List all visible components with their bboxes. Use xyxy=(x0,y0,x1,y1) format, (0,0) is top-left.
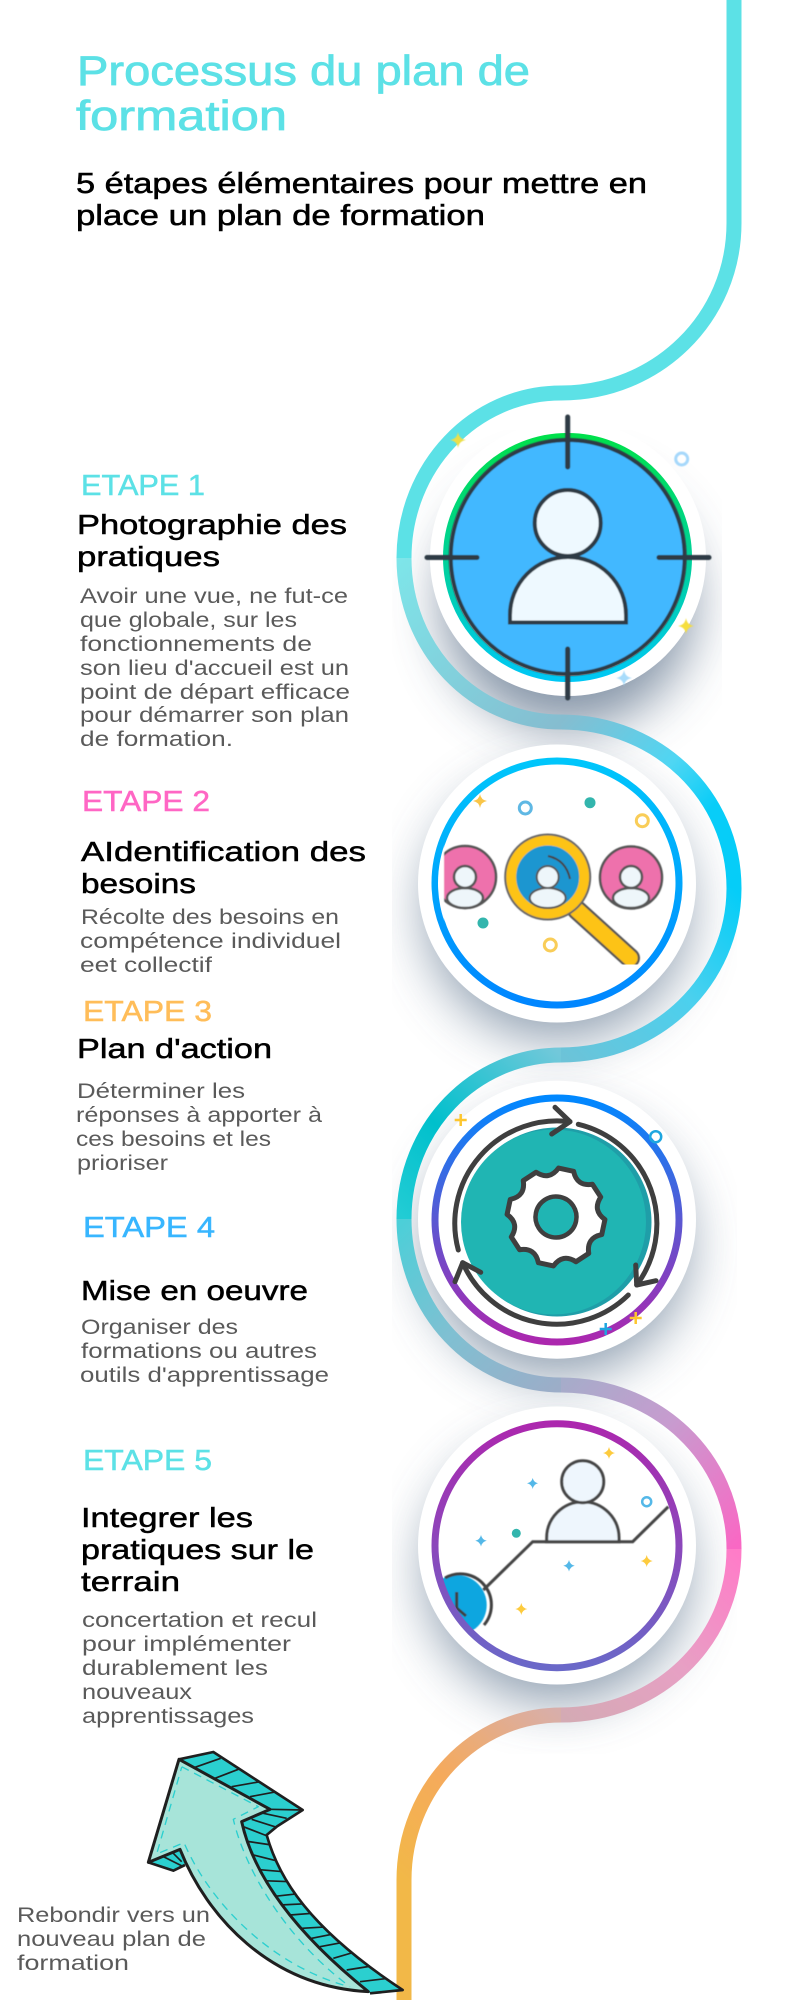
step 5 description: apprentissages xyxy=(82,1704,254,1728)
step 4 description: outils d'apprentissage xyxy=(80,1363,329,1387)
step 2 label: ETAPE 2 xyxy=(82,786,210,818)
step 3 text xyxy=(76,996,322,1175)
subtitle xyxy=(76,168,647,232)
icon: magnifier over people xyxy=(418,744,696,1022)
title: Processus du plan de xyxy=(77,47,530,94)
step 3 label: ETAPE 3 xyxy=(83,996,212,1028)
step 2 description: Récolte des besoins en xyxy=(81,905,339,929)
title xyxy=(76,47,530,139)
step 1 description: point de départ efficace xyxy=(80,680,350,704)
step 1 description: que globale, sur les xyxy=(80,608,297,632)
step 1 description: fonctionnements de xyxy=(80,632,312,656)
step 5 heading: pratiques sur le xyxy=(81,1534,314,1565)
step 2 heading xyxy=(81,836,366,899)
step 5 description: concertation et recul xyxy=(82,1608,317,1632)
step 5 text xyxy=(81,1445,317,1728)
step 3 description: prioriser xyxy=(77,1151,168,1175)
step 2 heading: AIdentification des xyxy=(81,836,366,867)
step 2 description: compétence individuel xyxy=(80,929,341,953)
closing note xyxy=(17,1903,210,1975)
closing note: Rebondir vers un xyxy=(17,1903,210,1927)
step 2 description: eet collectif xyxy=(80,953,212,977)
step 5 description: nouveaux xyxy=(82,1680,192,1704)
clock xyxy=(443,1572,494,1630)
gear xyxy=(499,1160,613,1274)
step 5 heading: terrain xyxy=(81,1566,180,1597)
step 3 description: ces besoins et les xyxy=(76,1127,271,1151)
step 2 heading: besoins xyxy=(81,868,196,899)
arrow front face xyxy=(148,1759,368,1992)
step 5 description xyxy=(82,1608,317,1728)
step 1 text xyxy=(77,470,350,751)
step 5 description: pour implémenter xyxy=(82,1632,291,1656)
step 1 description: son lieu d'accueil est un xyxy=(80,656,349,680)
step 4 text xyxy=(80,1212,329,1387)
magnifier xyxy=(505,834,630,958)
subtitle: 5 étapes élémentaires pour mettre en xyxy=(76,168,647,200)
step 1 description: de formation. xyxy=(80,727,233,751)
arrow stitching xyxy=(157,1767,350,1987)
step 5 heading xyxy=(81,1502,314,1597)
closing note: nouveau plan de xyxy=(17,1927,206,1951)
step 1 description xyxy=(80,584,350,751)
step 4 heading: Mise en oeuvre xyxy=(81,1275,308,1306)
disc shadows xyxy=(425,476,694,1703)
icon: gear cycle xyxy=(418,1081,696,1359)
step 3 heading: Plan d'action xyxy=(77,1033,272,1064)
step 1 label: ETAPE 1 xyxy=(81,470,205,502)
left avatar xyxy=(438,844,498,922)
icon: person on rising path xyxy=(418,1406,696,1684)
subtitle: place un plan de formation xyxy=(76,200,485,232)
step 3 description xyxy=(76,1079,322,1175)
winding gradient path xyxy=(404,0,734,2000)
step 2 text xyxy=(80,786,366,977)
step 5 description: durablement les xyxy=(82,1656,268,1680)
step 4 description: Organiser des xyxy=(81,1315,238,1339)
step 1 heading: pratiques xyxy=(77,541,220,572)
step 5 label: ETAPE 5 xyxy=(83,1445,212,1477)
arrow side outline xyxy=(148,1752,403,1993)
closing note: formation xyxy=(17,1951,129,1975)
step 1 description: pour démarrer son plan xyxy=(80,703,349,727)
arrow side faces xyxy=(148,1752,403,1993)
step 3 description: réponses à apporter à xyxy=(76,1103,322,1127)
arrow side hatching xyxy=(163,1758,388,1982)
cycle arrows xyxy=(455,1107,657,1324)
step 5 heading: Integrer les xyxy=(81,1502,253,1533)
step 1 heading: Photographie des xyxy=(77,509,347,540)
arrow: back to a new plan xyxy=(148,1752,403,1993)
step 4 description xyxy=(80,1315,329,1387)
title: formation xyxy=(76,92,287,139)
step 4 description: formations ou autres xyxy=(81,1339,317,1363)
step 1 heading xyxy=(77,509,347,572)
step 2 description xyxy=(80,905,341,977)
icon: target person xyxy=(427,417,709,698)
step 3 description: Déterminer les xyxy=(77,1079,245,1103)
step 4 label: ETAPE 4 xyxy=(83,1212,215,1244)
right avatar xyxy=(600,846,662,908)
step 1 description: Avoir une vue, ne fut-ce xyxy=(80,584,348,608)
